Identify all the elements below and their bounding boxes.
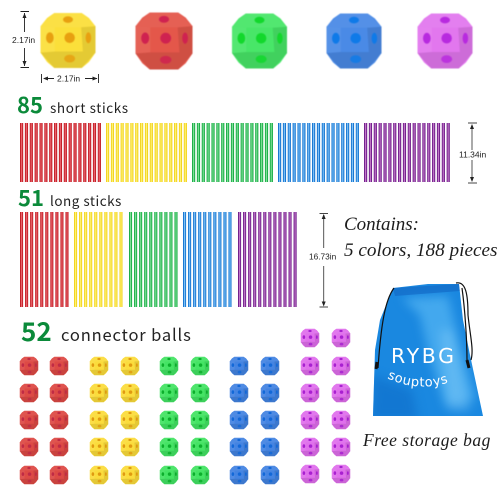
bag shading [370, 284, 476, 420]
dimension: ball width 2.17in: 2.17in [57, 74, 80, 84]
connector balls: purple [301, 329, 350, 483]
bag body [373, 284, 483, 416]
connector balls: blue [230, 357, 279, 484]
blue short sticks [278, 123, 359, 182]
blue long sticks [183, 212, 232, 307]
yellow long sticks [74, 212, 124, 307]
dimension: ball height 2.17in: 2.17in [12, 35, 35, 45]
icon: purple ball [418, 13, 472, 68]
icon: yellow ball [40, 13, 96, 68]
dimension: long stick length 16.73in [309, 214, 337, 307]
caption: free storage bag: Free storage bag [362, 430, 491, 450]
long sticks chart [20, 212, 298, 307]
connector balls: yellow [90, 357, 139, 484]
heading: 85 short sticks [17, 88, 129, 120]
icon: blue storage bag [373, 282, 483, 416]
connector balls: red [20, 357, 68, 484]
red long sticks [20, 212, 70, 307]
heading: 52 connector balls: connector balls [61, 322, 192, 346]
heading: 85 short sticks: 85 [17, 88, 43, 120]
icon: red ball [136, 12, 192, 70]
text: contains: Contains: [344, 214, 419, 235]
heading: 51 long sticks: long sticks [50, 190, 122, 210]
text: contains [344, 214, 497, 261]
connector balls: green [160, 357, 209, 484]
heading: 51 long sticks: 51 [18, 181, 44, 213]
green short sticks [192, 123, 273, 182]
heading: 52 connector balls: 52 [21, 312, 52, 349]
text: contains: 5 colors, 188 pieces [344, 240, 497, 261]
dimension: ball height 2.17in [12, 12, 35, 68]
dimension: long stick length 16.73in: 16.73in [309, 252, 337, 262]
icon: blue ball [326, 13, 382, 68]
red short sticks [20, 123, 101, 182]
heading: 52 connector balls [21, 312, 192, 349]
bag logo: RYBG [391, 344, 454, 368]
yellow short sticks [106, 123, 187, 182]
bag drawstrings [378, 283, 472, 368]
dimension: ball width 2.17in [42, 74, 98, 84]
heading: 51 long sticks [18, 181, 122, 213]
purple long sticks [238, 212, 298, 307]
bag brand arc [387, 376, 464, 387]
heading: 85 short sticks: short sticks [50, 97, 129, 117]
short sticks chart [20, 123, 450, 182]
bag brand: souptoys [388, 372, 448, 388]
purple short sticks [364, 123, 450, 182]
large connector balls row [40, 12, 472, 70]
dimension: short stick length 11.34in [459, 123, 487, 183]
green long sticks [129, 212, 178, 307]
icon: green ball [232, 13, 287, 68]
bag cord ends [376, 360, 469, 369]
dimension: short stick length 11.34in: 11.34in [459, 150, 487, 160]
